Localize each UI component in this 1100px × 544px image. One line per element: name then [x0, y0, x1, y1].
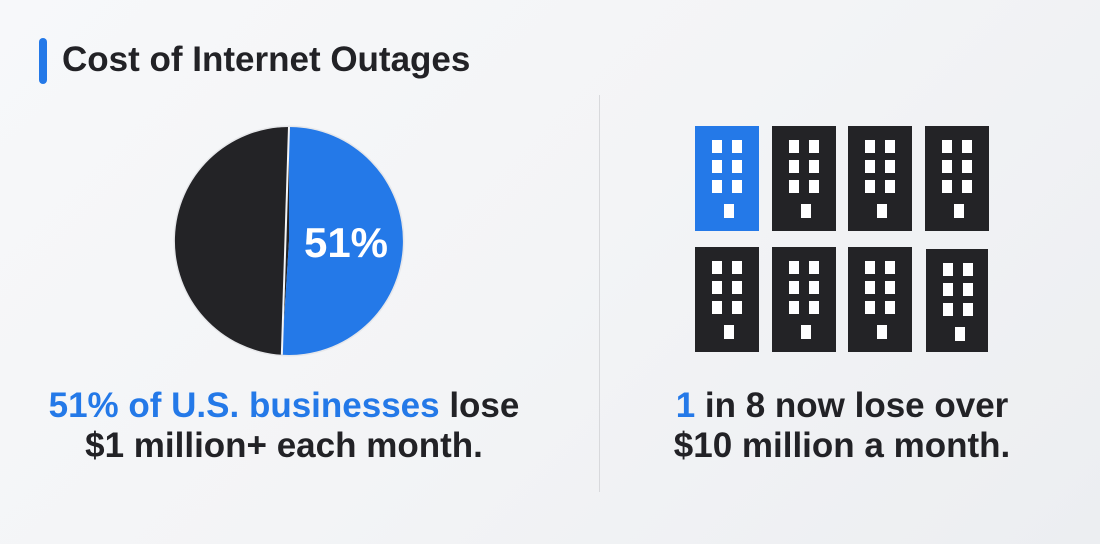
- pie chart: 51%: [304, 219, 388, 266]
- pie chart: [174, 126, 404, 356]
- caption right: 1 in 8 now lose over: [676, 386, 1008, 425]
- caption left: 51% of U.S. businesses lose: [49, 386, 519, 425]
- caption right: $10 million a month.: [674, 426, 1010, 465]
- caption left: [49, 386, 519, 465]
- title: Cost of Internet Outages: [62, 40, 470, 79]
- caption left: $1 million+ each month.: [85, 426, 483, 465]
- title bar accent: [39, 38, 47, 84]
- caption right: [674, 386, 1010, 465]
- divider: [599, 95, 600, 492]
